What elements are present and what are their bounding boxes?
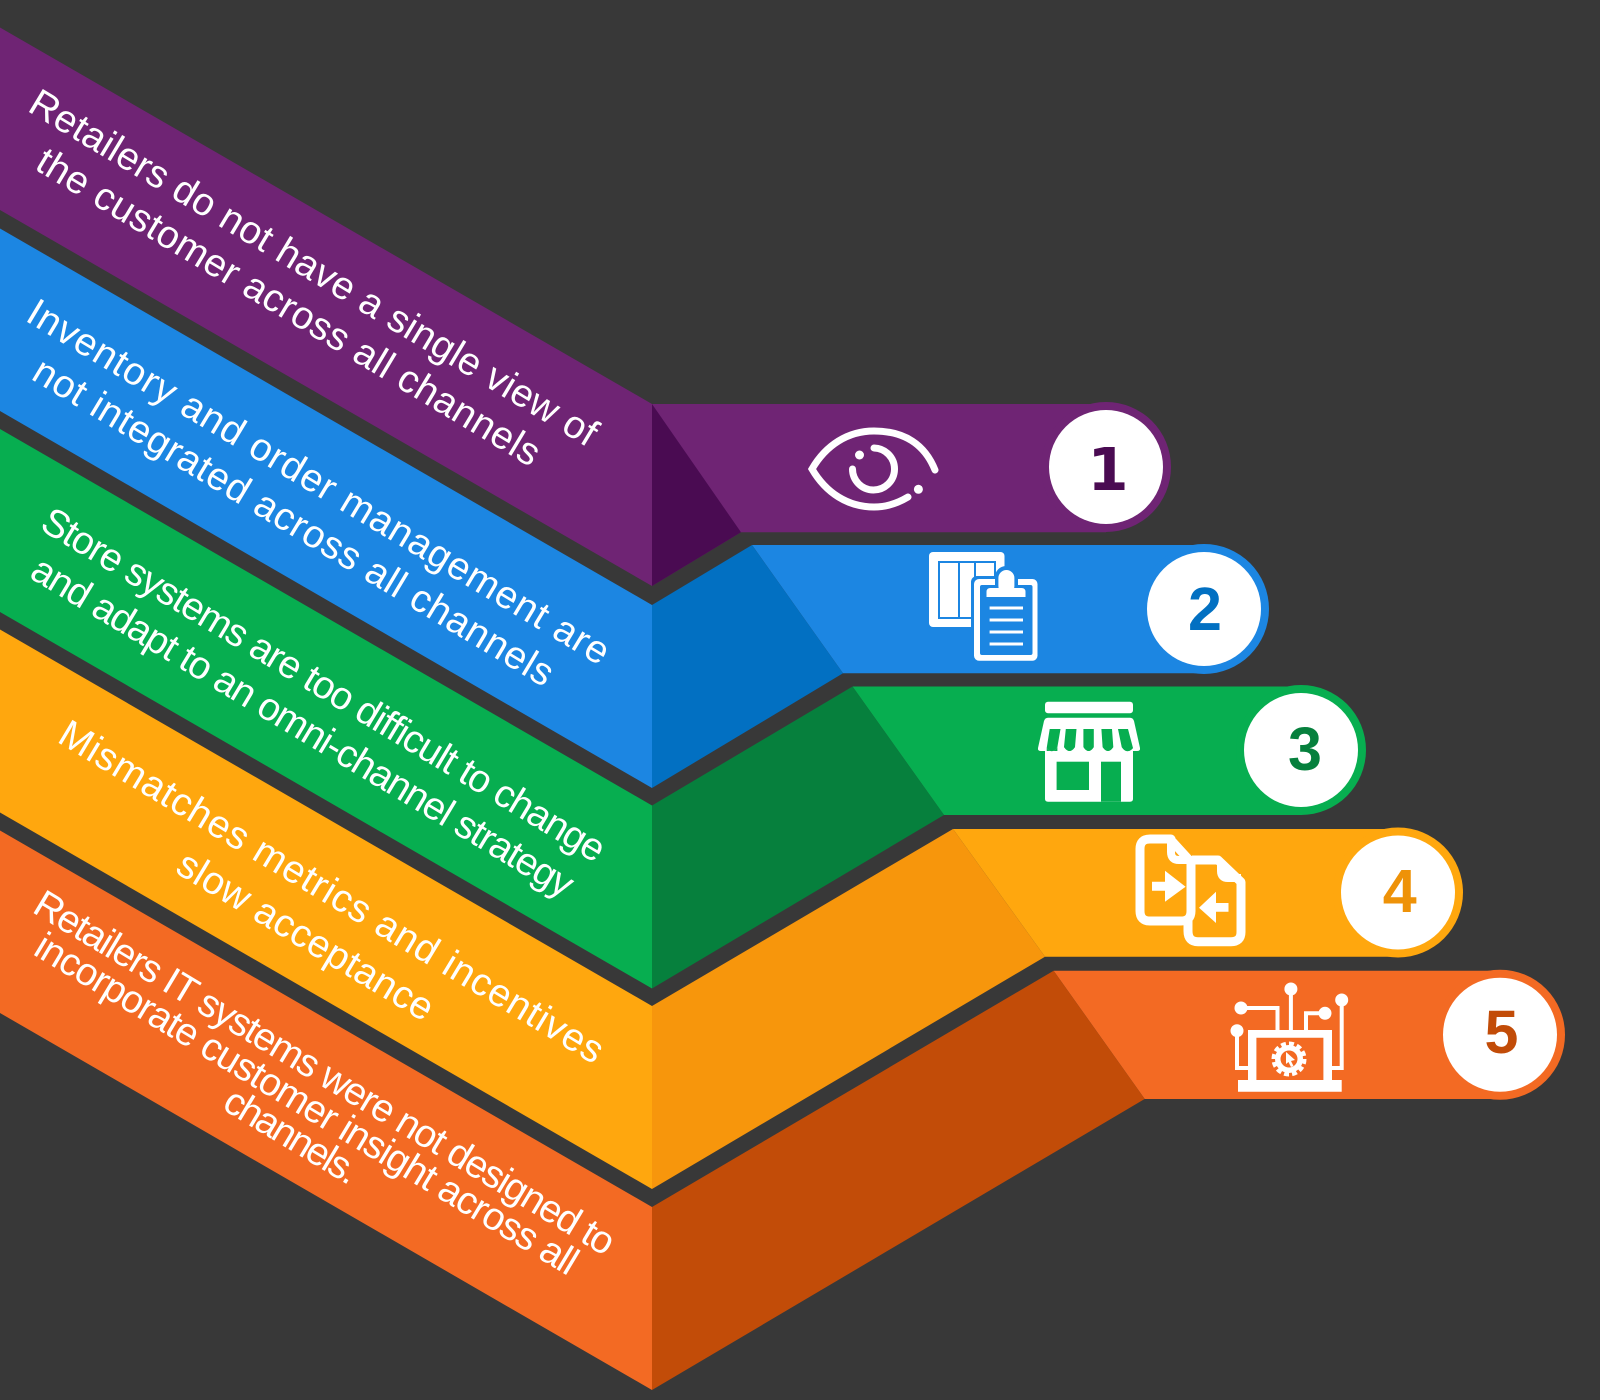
text: step 4: Mismatches metrics and incentives [51, 712, 612, 1072]
slanted band 1 [0, 28, 652, 586]
text: step 5: incorporate customer insight across all [27, 925, 586, 1284]
slanted band 2 [0, 228, 652, 788]
pill 1 [652, 402, 1171, 586]
panel: step 1 purple band [0, 28, 1171, 586]
panel: step 2 blue band [0, 228, 1269, 788]
fold shadow 3 [652, 686, 944, 988]
text: step 3: Store systems are too difficult to change [34, 499, 613, 871]
number badge 3: 3 [1288, 715, 1322, 783]
panel: step 3 green band [0, 429, 1366, 988]
number badge 3 [1244, 693, 1358, 807]
panel: step 5 orange band [0, 830, 1565, 1390]
slanted band 4 [0, 630, 652, 1189]
pill 4 [953, 828, 1463, 958]
number badge 4: 4 [1383, 857, 1417, 925]
number badge 1 [1049, 410, 1163, 524]
text: step 3: and adapt to an omni-channel strategy [23, 548, 582, 907]
text: step 1: the customer across all channels [29, 139, 548, 475]
text: step 2: Inventory and order management are [19, 291, 618, 674]
pill 2 [752, 544, 1269, 674]
number badge 5 [1443, 978, 1557, 1092]
fold shadow 1 [652, 404, 741, 586]
number badge 5: 5 [1485, 998, 1518, 1066]
icon: exchange documents [1140, 839, 1241, 942]
fold shadow 2 [652, 545, 843, 788]
fold shadow 4 [652, 829, 1045, 1189]
pill 3 [852, 685, 1366, 815]
number badge 2: 2 [1188, 575, 1222, 643]
text: step 5: Retailers IT systems were not designed to [26, 882, 623, 1264]
slanted band 3 [0, 429, 652, 988]
text: step 4: slow acceptance [169, 843, 442, 1030]
pill 5 [1054, 970, 1565, 1100]
icon: laptop with circuit lines and gear [1230, 982, 1348, 1092]
text: step 1: Retailers do not have a single view of [22, 81, 605, 455]
text: step 2: not integrated across all channels [25, 349, 562, 695]
icon: inventory and clipboard [929, 552, 1039, 662]
icon: store [1038, 702, 1140, 802]
number badge 2 [1147, 552, 1261, 666]
panel: step 4 amber band [0, 630, 1463, 1189]
icon: eye [812, 431, 935, 507]
fold shadow 5 [652, 971, 1145, 1390]
text: step 5: channels. [216, 1079, 367, 1193]
slanted band 5 [0, 830, 652, 1390]
number badge 4 [1341, 836, 1455, 950]
number badge 1: 1 [1087, 435, 1129, 504]
